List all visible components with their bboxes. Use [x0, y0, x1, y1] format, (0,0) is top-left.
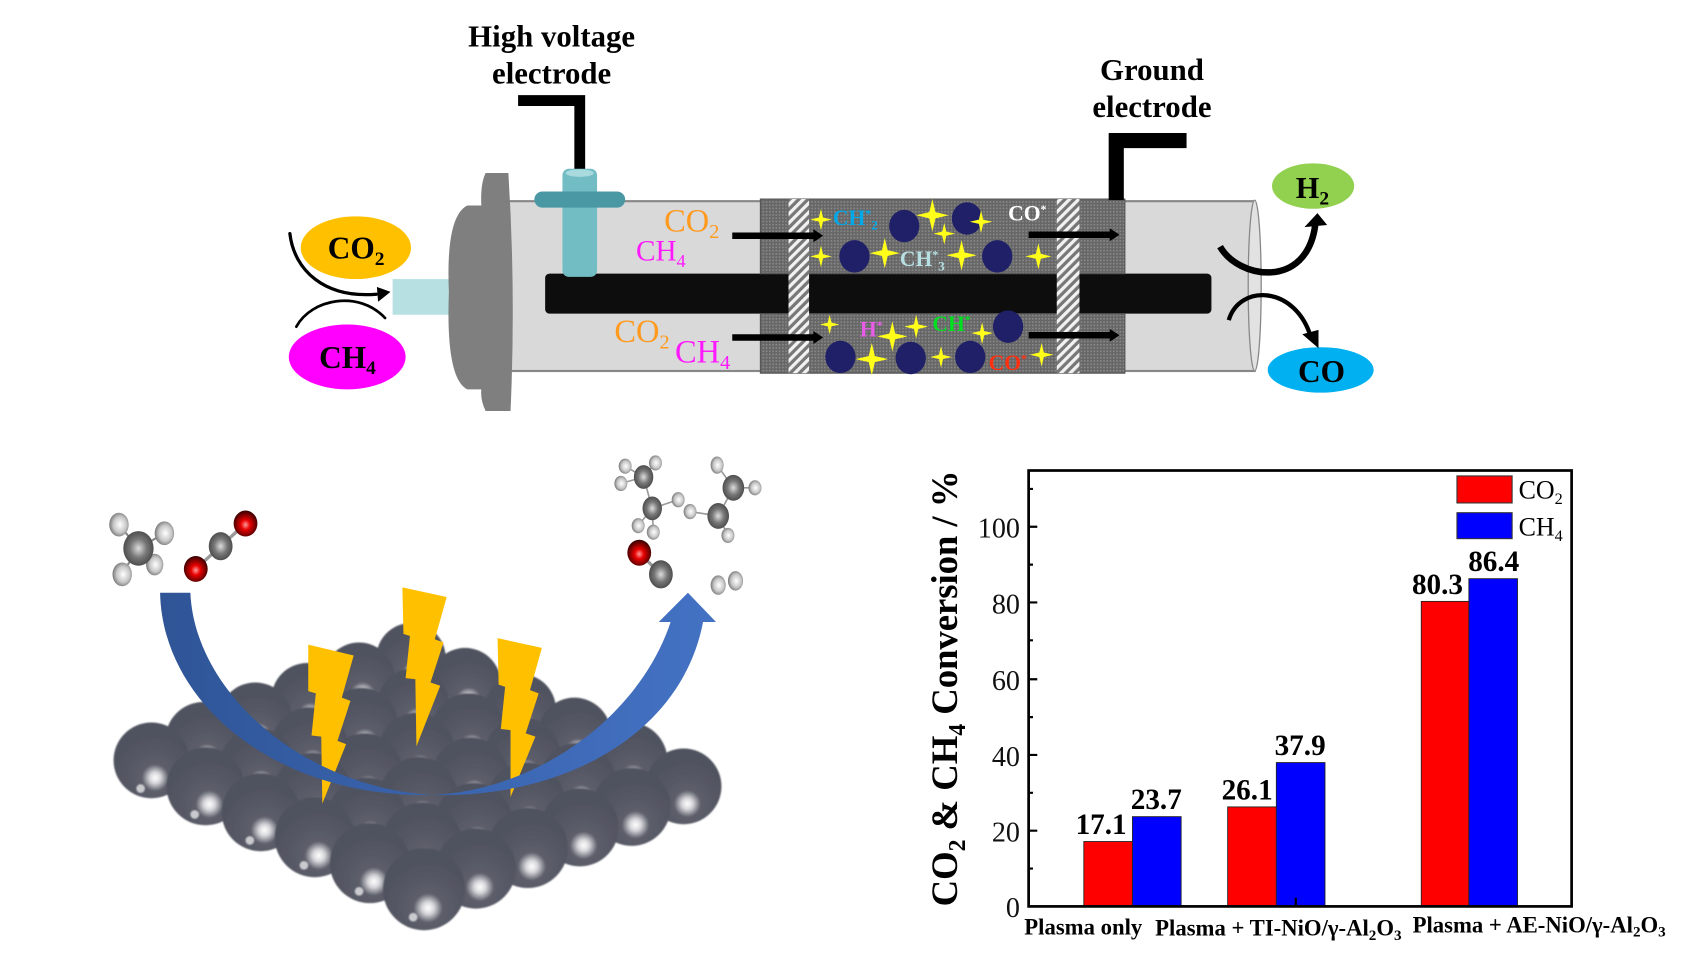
gas flow arrows [732, 228, 1119, 344]
catalyst sphere bed [114, 623, 721, 930]
ceramic fitting [534, 169, 625, 277]
plasma sparks [810, 199, 1054, 375]
inlet gas labels inside tube: CO [664, 203, 709, 239]
legend [1457, 476, 1563, 545]
lightning bolts [308, 587, 542, 804]
radical labels: 2 [871, 217, 878, 232]
y axis title: 4 [945, 724, 971, 736]
bars: plasma + AE-NiO [1421, 579, 1518, 906]
reactant: CH4 [289, 324, 406, 389]
y axis title: 2 [945, 839, 971, 851]
reactor flange [448, 173, 513, 411]
radical labels: * [932, 248, 938, 262]
plot frame [1029, 471, 1572, 906]
molecule: methane [109, 513, 174, 586]
reactant: CO2 [301, 216, 411, 279]
heading: ground electrode: electrode [1092, 90, 1212, 124]
radical labels [833, 202, 1047, 375]
high voltage electrode wire [518, 101, 580, 173]
bar value labels: 86.4 [1468, 546, 1520, 578]
radical labels: CH [900, 247, 932, 271]
legend: CH [1519, 512, 1555, 541]
molecule: carbon monoxide [627, 540, 673, 588]
bar value labels: 37.9 [1275, 730, 1326, 762]
ground electrode discharge zone [760, 199, 1125, 373]
product: H2 [1272, 163, 1354, 209]
heading: high voltage electrode: electrode [492, 56, 611, 90]
bar value labels [1076, 546, 1520, 841]
radical labels: 3 [938, 258, 945, 273]
radical labels: CO [989, 351, 1021, 375]
x axis category labels: 2 [1369, 928, 1376, 944]
y axis tick labels: 100 [978, 514, 1020, 545]
heading: ground electrode [1092, 53, 1212, 124]
curved blue reaction arrow [160, 593, 716, 795]
heading: high voltage electrode: High voltage [468, 20, 635, 54]
molecule: carbon dioxide [184, 511, 257, 582]
quartz tube [508, 201, 1255, 371]
inlet gas labels inside tube: CO [614, 314, 659, 350]
reactant: CO2: CO [328, 231, 375, 266]
y axis tick labels: 60 [992, 666, 1020, 697]
inlet gas labels inside tube: 4 [677, 251, 686, 271]
legend: 4 [1555, 527, 1563, 545]
radical labels: * [1021, 351, 1027, 365]
y axis tick labels: 40 [992, 742, 1020, 773]
bar value labels: 80.3 [1412, 569, 1463, 601]
radical labels: * [877, 318, 883, 332]
outlet arrows [1220, 213, 1327, 348]
central rod electrode [545, 274, 1211, 314]
y axis tick labels: 20 [992, 818, 1020, 849]
radical labels: CH [833, 206, 865, 230]
molecule: ethane [614, 455, 685, 540]
reactant: CO2: 2 [375, 249, 385, 270]
inlet gas labels inside tube [614, 203, 730, 374]
x axis category labels: O [1641, 912, 1658, 937]
molecule: hydrogen [711, 571, 743, 595]
legend: CO [1519, 476, 1555, 505]
bars: plasma only [1084, 817, 1181, 906]
molecule: ethylene [684, 456, 761, 543]
reactant: CH4: CH [319, 340, 366, 375]
y axis tick labels: 0 [1006, 893, 1020, 924]
bar value labels: 17.1 [1076, 809, 1127, 841]
radical labels: H [860, 317, 877, 341]
y axis title: & CH [924, 736, 965, 840]
bar value labels: 23.7 [1131, 784, 1182, 816]
catalyst particles [825, 202, 1023, 374]
panel: conversion bar chart [924, 471, 1666, 944]
radical labels: * [865, 206, 871, 220]
y axis tick labels [978, 514, 1020, 924]
radical labels: * [965, 312, 971, 326]
bar value labels: 26.1 [1222, 774, 1273, 806]
x axis category labels: Plasma + TI-NiO/γ-Al [1155, 916, 1369, 941]
y axis ticks [1029, 489, 1296, 906]
y axis title: Conversion / % [924, 471, 965, 724]
x axis category labels [1024, 912, 1666, 944]
radical labels: * [1041, 202, 1047, 216]
y axis tick labels: 80 [992, 589, 1020, 620]
inlet gas labels inside tube: 2 [659, 331, 670, 353]
product: H2: H [1296, 171, 1319, 205]
product: CO: CO [1298, 354, 1345, 389]
x axis category labels: O [1376, 916, 1394, 941]
tube open end [1248, 200, 1261, 371]
inlet gas labels inside tube: 2 [709, 221, 719, 243]
panel: plasma reactor diagram [289, 20, 1374, 411]
sphere secondary highlights [136, 784, 418, 922]
inlet gas labels inside tube: CH [636, 236, 677, 268]
product: H2: 2 [1319, 188, 1329, 209]
inlet arrows [290, 234, 389, 327]
heading: high voltage electrode [468, 20, 635, 90]
inlet gas labels inside tube: 4 [720, 352, 730, 374]
legend: 2 [1555, 490, 1563, 508]
gas inlet connector [393, 279, 451, 315]
reactant: CH4: 4 [366, 358, 376, 379]
radical labels: CO [1008, 202, 1041, 226]
radical labels: CH [932, 312, 965, 336]
ground electrode wire [1116, 141, 1187, 200]
x axis category labels: Plasma + AE-NiO/γ-Al [1413, 912, 1633, 937]
product: CO [1268, 347, 1374, 393]
x axis category labels: 2 [1633, 925, 1641, 941]
y axis title: CO [924, 851, 965, 906]
heading: ground electrode: Ground [1100, 53, 1204, 87]
inlet gas labels inside tube: CH [675, 334, 720, 370]
x axis category labels: 3 [1394, 928, 1402, 944]
panel: catalyst surface reaction [109, 455, 761, 930]
x axis category labels: 3 [1658, 925, 1666, 941]
x axis category labels: Plasma only [1024, 915, 1143, 940]
bars: plasma + TI-NiO [1228, 763, 1325, 906]
